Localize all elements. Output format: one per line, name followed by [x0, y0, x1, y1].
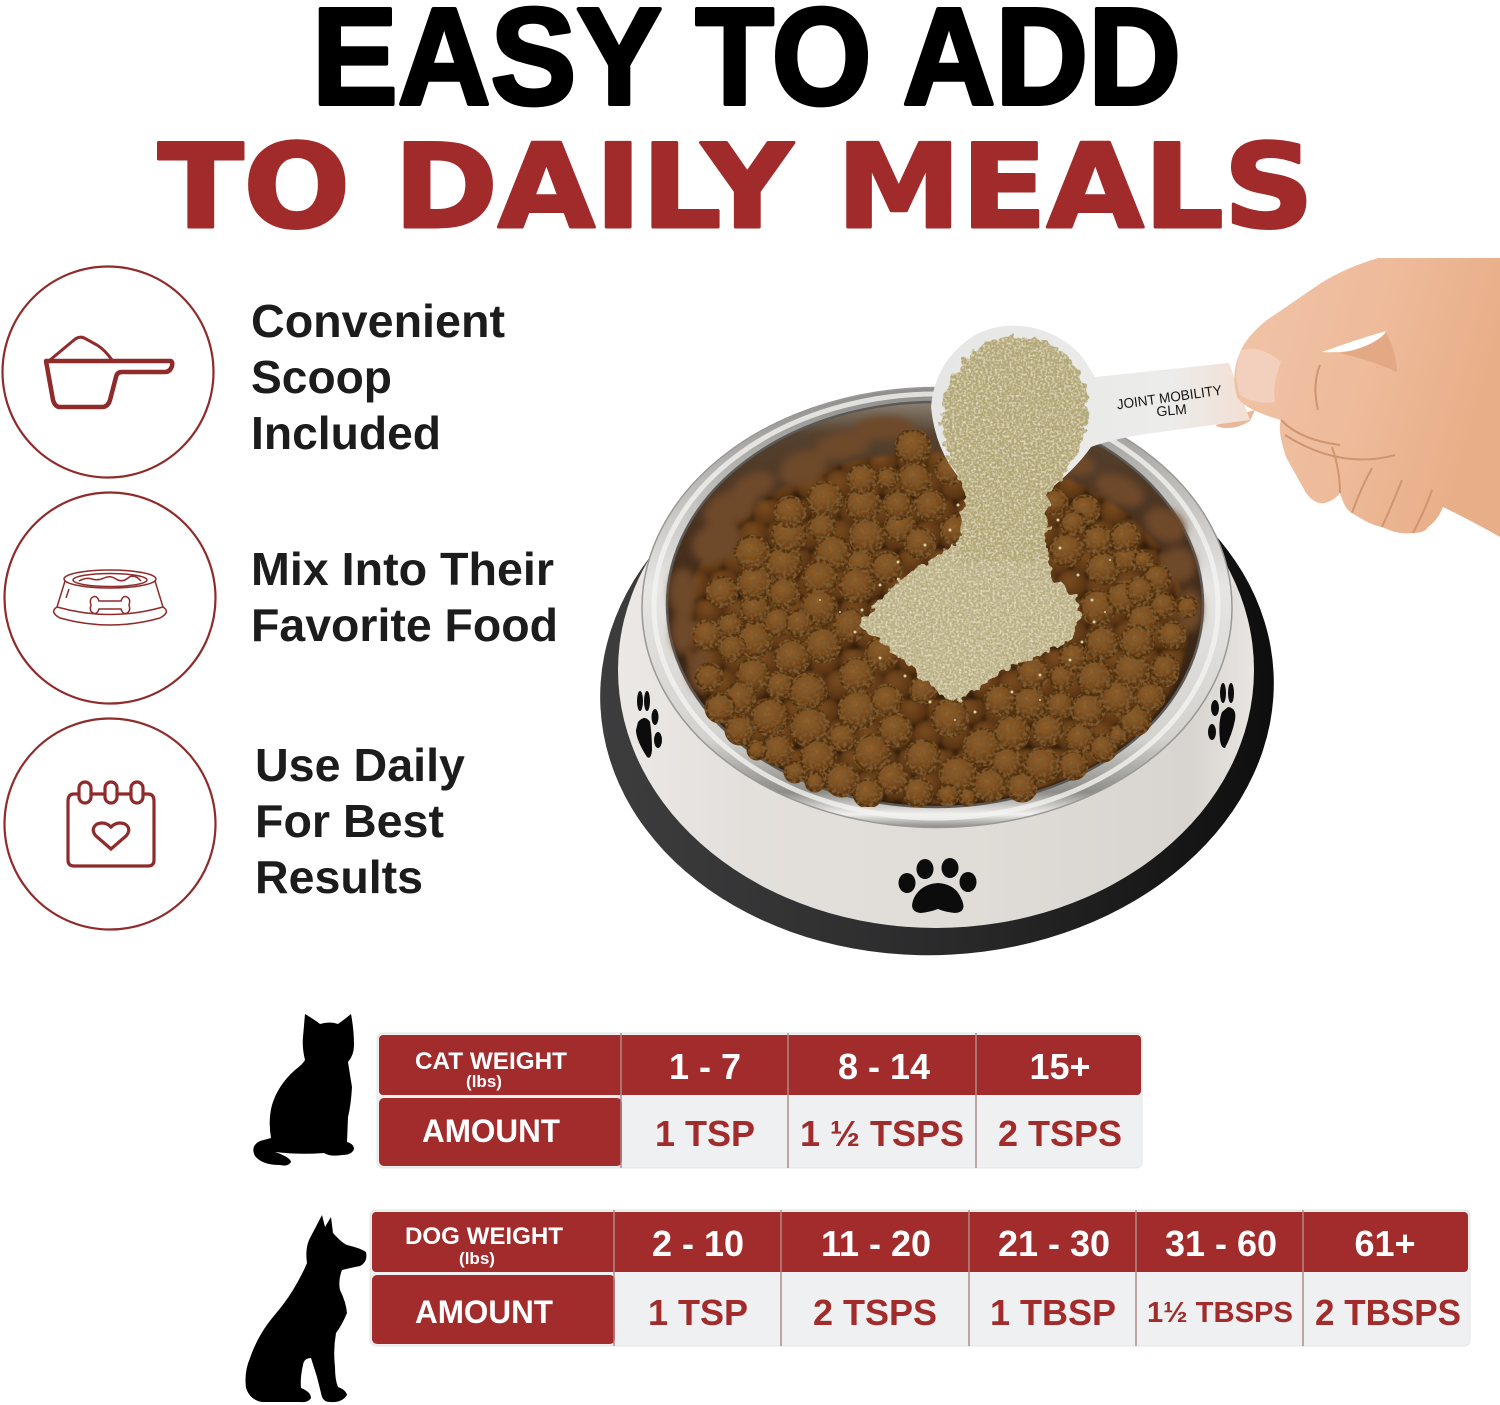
icon: dog silhouette [246, 1215, 366, 1402]
feature text: daily: For Best [255, 795, 444, 847]
icon: calendar heart in circle [4, 718, 216, 930]
dog amounts: 1 TBSP [990, 1292, 1116, 1333]
bowl rubber base [587, 408, 1287, 972]
rim highlight ring [654, 394, 1218, 818]
scoop label: JOINT MOBILITY [1116, 382, 1224, 412]
bowl rim [642, 388, 1232, 828]
panel: dog dosage [246, 1210, 1470, 1402]
feature text: daily: Use Daily [255, 739, 465, 791]
illustration: hand holding scoop [931, 258, 1500, 560]
dog amounts [648, 1292, 1461, 1333]
paw print right [1208, 683, 1235, 748]
dog weights: 2 - 10 [652, 1223, 744, 1264]
title [158, 0, 1314, 255]
table: cat weight [377, 1033, 1142, 1168]
dog amounts: 1 TSP [648, 1292, 748, 1333]
panel: cat dosage [253, 1014, 1142, 1168]
bowl inner wall [667, 402, 1203, 807]
feature text: daily [255, 739, 465, 903]
fingertip under scoop handle [1216, 410, 1255, 428]
dog amounts: 1½ TBSPS [1147, 1297, 1293, 1329]
icon: scoop in circle [2, 266, 214, 478]
feature text: daily: Results [255, 851, 423, 903]
icon: pet bowl in circle [4, 492, 216, 704]
paw print left [636, 691, 662, 758]
feature text: mix: Favorite Food [251, 599, 558, 651]
background kibble layer [683, 452, 1187, 804]
feature text: scoop: Scoop [251, 351, 392, 403]
cat weights [669, 1046, 1091, 1087]
dog amounts: 2 TSPS [813, 1292, 937, 1333]
powder in scoop and pouring stream [941, 336, 1087, 560]
scoop: GLM [1156, 401, 1187, 419]
cat amounts: 1 TSP [655, 1113, 755, 1154]
bowl body [618, 412, 1254, 928]
hand [1234, 258, 1500, 537]
dog weights: 31 - 60 [1165, 1223, 1277, 1264]
table: dog weight: (lbs) [459, 1249, 495, 1268]
cat weights: 8 - 14 [838, 1046, 930, 1087]
powder speckles [819, 504, 1111, 721]
thumb nail [1236, 349, 1281, 403]
paw print front [898, 858, 976, 913]
table: dog weight [370, 1210, 1470, 1346]
cat weights: 1 - 7 [669, 1046, 741, 1087]
panel: feature list [2, 266, 558, 930]
illustration: steel pet bowl with kibble [587, 388, 1287, 972]
finger creases [1281, 365, 1432, 533]
dog amount label: AMOUNT [415, 1294, 553, 1330]
cat amounts: 2 TSPS [998, 1113, 1122, 1154]
feature text: scoop: Convenient [251, 295, 505, 347]
title line 2: TO DAILY MEALS [158, 120, 1314, 255]
scoop [931, 326, 1250, 560]
cat amounts [655, 1113, 1122, 1154]
dog weights: 11 - 20 [821, 1223, 931, 1264]
dog weights: 61+ [1354, 1223, 1416, 1264]
dog weights [652, 1223, 1416, 1264]
feature text: scoop [251, 295, 505, 459]
supplement powder mound [860, 540, 1080, 703]
cat amount label: AMOUNT [422, 1113, 560, 1149]
feature text: mix [251, 543, 558, 651]
inner finger shadow [1340, 333, 1397, 372]
dog amounts: 2 TBSPS [1315, 1292, 1461, 1333]
gap between thumb and fingers [1322, 331, 1386, 352]
feature text: mix: Mix Into Their [251, 543, 554, 595]
kibble pieces [693, 430, 1197, 807]
dog weights: 21 - 30 [998, 1223, 1110, 1264]
feature text: scoop: Included [251, 407, 441, 459]
blurred kibble reflections [669, 416, 1202, 692]
table: cat weight: (lbs) [466, 1072, 502, 1091]
cat weights: 15+ [1029, 1046, 1091, 1087]
dog weight label: DOG WEIGHT [405, 1223, 563, 1250]
cat amounts: 1 ½ TSPS [800, 1113, 964, 1154]
cat weight label: CAT WEIGHT [415, 1048, 567, 1075]
icon: cat silhouette [253, 1014, 354, 1166]
